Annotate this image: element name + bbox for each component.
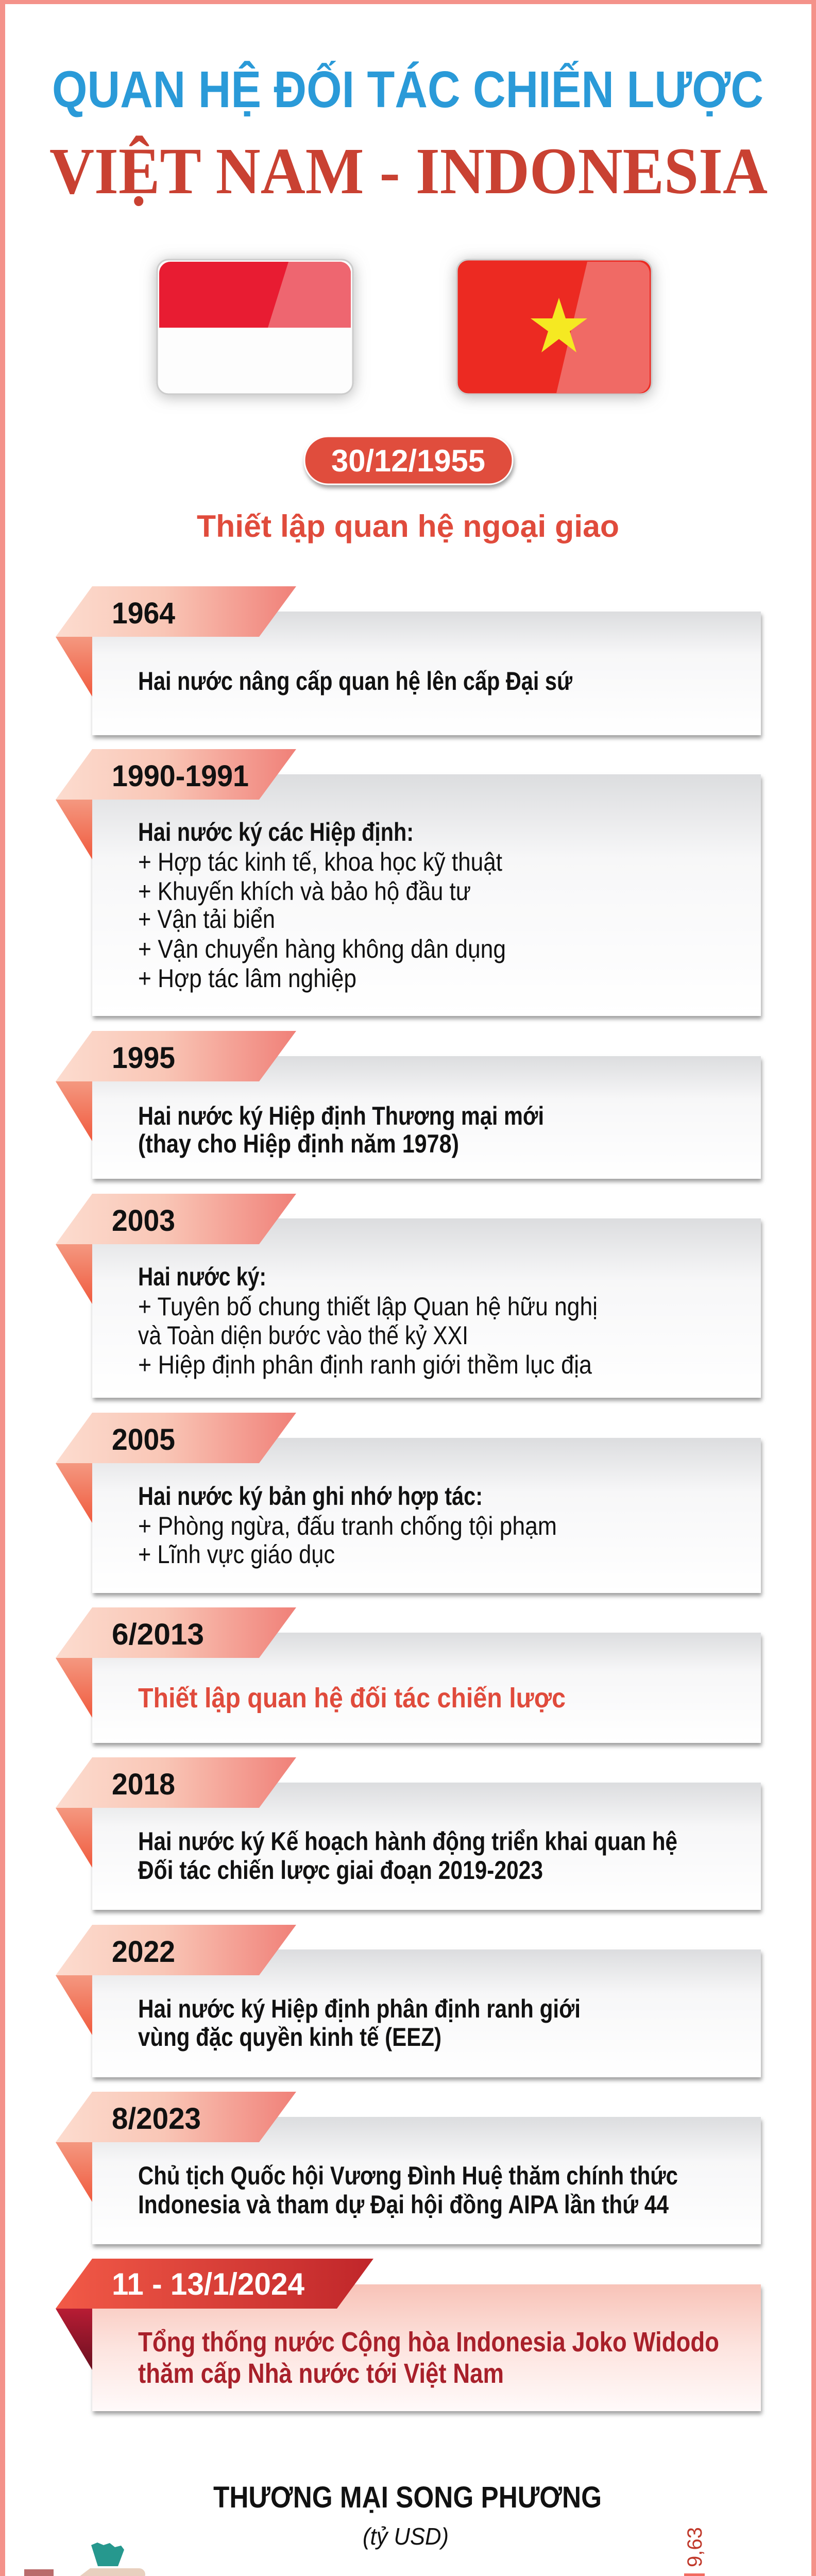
timeline card: 2003: Hai nước ký: — [138, 1262, 266, 1291]
timeline card: 1995: Hai nước ký Hiệp định Thương mại mới — [138, 1101, 544, 1130]
flag: Indonesia — [157, 260, 353, 394]
timeline card: 2022 — [56, 1925, 761, 2077]
timeline card: 2003 — [56, 1194, 761, 1398]
title line 2: VIỆT NAM - INDONESIA — [49, 134, 768, 208]
timeline card: 2018: Đối tác chiến lược giai đoạn 2019-2023 — [138, 1856, 543, 1885]
timeline card: 1995: 1995 — [112, 1041, 175, 1075]
subtitle: establishment of diplomatic relations: Thiết lập quan hệ ngoại giao — [197, 509, 619, 544]
timeline card: 2022: 2022 — [112, 1935, 175, 1969]
timeline card: 2005: + Lĩnh vực giáo dục — [138, 1540, 335, 1569]
timeline card: 1995: (thay cho Hiệp định năm 1978) — [138, 1129, 459, 1158]
timeline card: 2018: 2018 — [112, 1768, 175, 1801]
timeline card: 1964: 1964 — [112, 597, 175, 630]
timeline card: 1990-1991: + Khuyến khích và bảo hộ đầu tư — [138, 877, 471, 906]
date pill — [304, 436, 513, 484]
timeline card: 11-13/1/2024 highlight: thăm cấp Nhà nước tới Việt Nam — [138, 2358, 504, 2389]
timeline card: 1964 — [56, 586, 761, 735]
timeline card: 2005: Hai nước ký bản ghi nhớ hợp tác: — [138, 1482, 483, 1511]
timeline card: 2003: 2003 — [112, 1204, 175, 1238]
timeline card: 1990-1991 — [56, 749, 761, 1016]
timeline card: 8/2023: Indonesia và tham dự Đại hội đồng AIPA lần thứ 44 — [138, 2190, 669, 2219]
timeline card: 8/2023: 8/2023 — [112, 2102, 201, 2136]
timeline card: 2022: Hai nước ký Hiệp định phân định ranh giới — [138, 1994, 581, 2023]
timeline card: 8/2023: Chủ tịch Quốc hội Vương Đình Huệ thăm chính thức — [138, 2161, 678, 2190]
date pill: 30/12/1955 — [331, 444, 485, 478]
timeline card: 2005 — [56, 1413, 761, 1593]
timeline card: 2018 — [56, 1757, 761, 1910]
timeline card: 1990-1991: + Vận tải biển — [138, 905, 275, 934]
timeline card: 2003: + Hiệp định phân định ranh giới thềm lục địa — [138, 1350, 592, 1379]
chart title — [213, 2481, 602, 2550]
timeline card: 1990-1991: + Vận chuyển hàng không dân dụng — [138, 935, 506, 963]
timeline card: 2005: 2005 — [112, 1423, 175, 1456]
timeline card: 11-13/1/2024 highlight: 11 - 13/1/2024 — [112, 2267, 305, 2301]
timeline card: 1990-1991: + Hợp tác lâm nghiệp — [138, 964, 356, 993]
icon: hand with money bag and boxes — [24, 2543, 246, 2576]
flag: Vietnam — [457, 260, 652, 394]
timeline card: 2005: + Phòng ngừa, đấu tranh chống tội phạm — [138, 1512, 557, 1540]
timeline card: 2018: Hai nước ký Kế hoạch hành động triển khai quan hệ — [138, 1827, 677, 1856]
chart title: THƯƠNG MẠI SONG PHƯƠNG — [213, 2481, 602, 2514]
timeline card: 6/2013: Thiết lập quan hệ đối tác chiến lược — [138, 1683, 566, 1714]
timeline card: 11-13/1/2024 highlight — [56, 2259, 761, 2411]
timeline card: 1990-1991: Hai nước ký các Hiệp định: — [138, 818, 414, 846]
timeline card: 1990-1991: 1990-1991 — [112, 759, 249, 793]
timeline card: 2003: + Tuyên bố chung thiết lập Quan hệ hữu nghị — [138, 1292, 598, 1321]
timeline card: 1995 — [56, 1031, 761, 1179]
timeline card: 8/2023 — [56, 2092, 761, 2244]
timeline card: 6/2013 — [56, 1607, 761, 1743]
bar chart: bilateral trade: 9,63 — [684, 2527, 706, 2567]
timeline card: 2003: và Toàn diện bước vào thế kỷ XXI — [138, 1321, 468, 1350]
timeline card: 1964: Hai nước nâng cấp quan hệ lên cấp Đại sứ — [138, 667, 573, 696]
timeline card: 6/2013: 6/2013 — [112, 1618, 204, 1651]
timeline card: 11-13/1/2024 highlight: Tổng thống nước Cộng hòa Indonesia Joko Widodo — [138, 2327, 719, 2358]
bar chart: bilateral trade — [22, 2527, 772, 2576]
timeline card: 1990-1991: + Hợp tác kinh tế, khoa học kỹ thuật — [138, 848, 502, 876]
chart title: (tỷ USD) — [363, 2523, 449, 2550]
timeline card: 2022: vùng đặc quyền kinh tế (EEZ) — [138, 2023, 441, 2052]
